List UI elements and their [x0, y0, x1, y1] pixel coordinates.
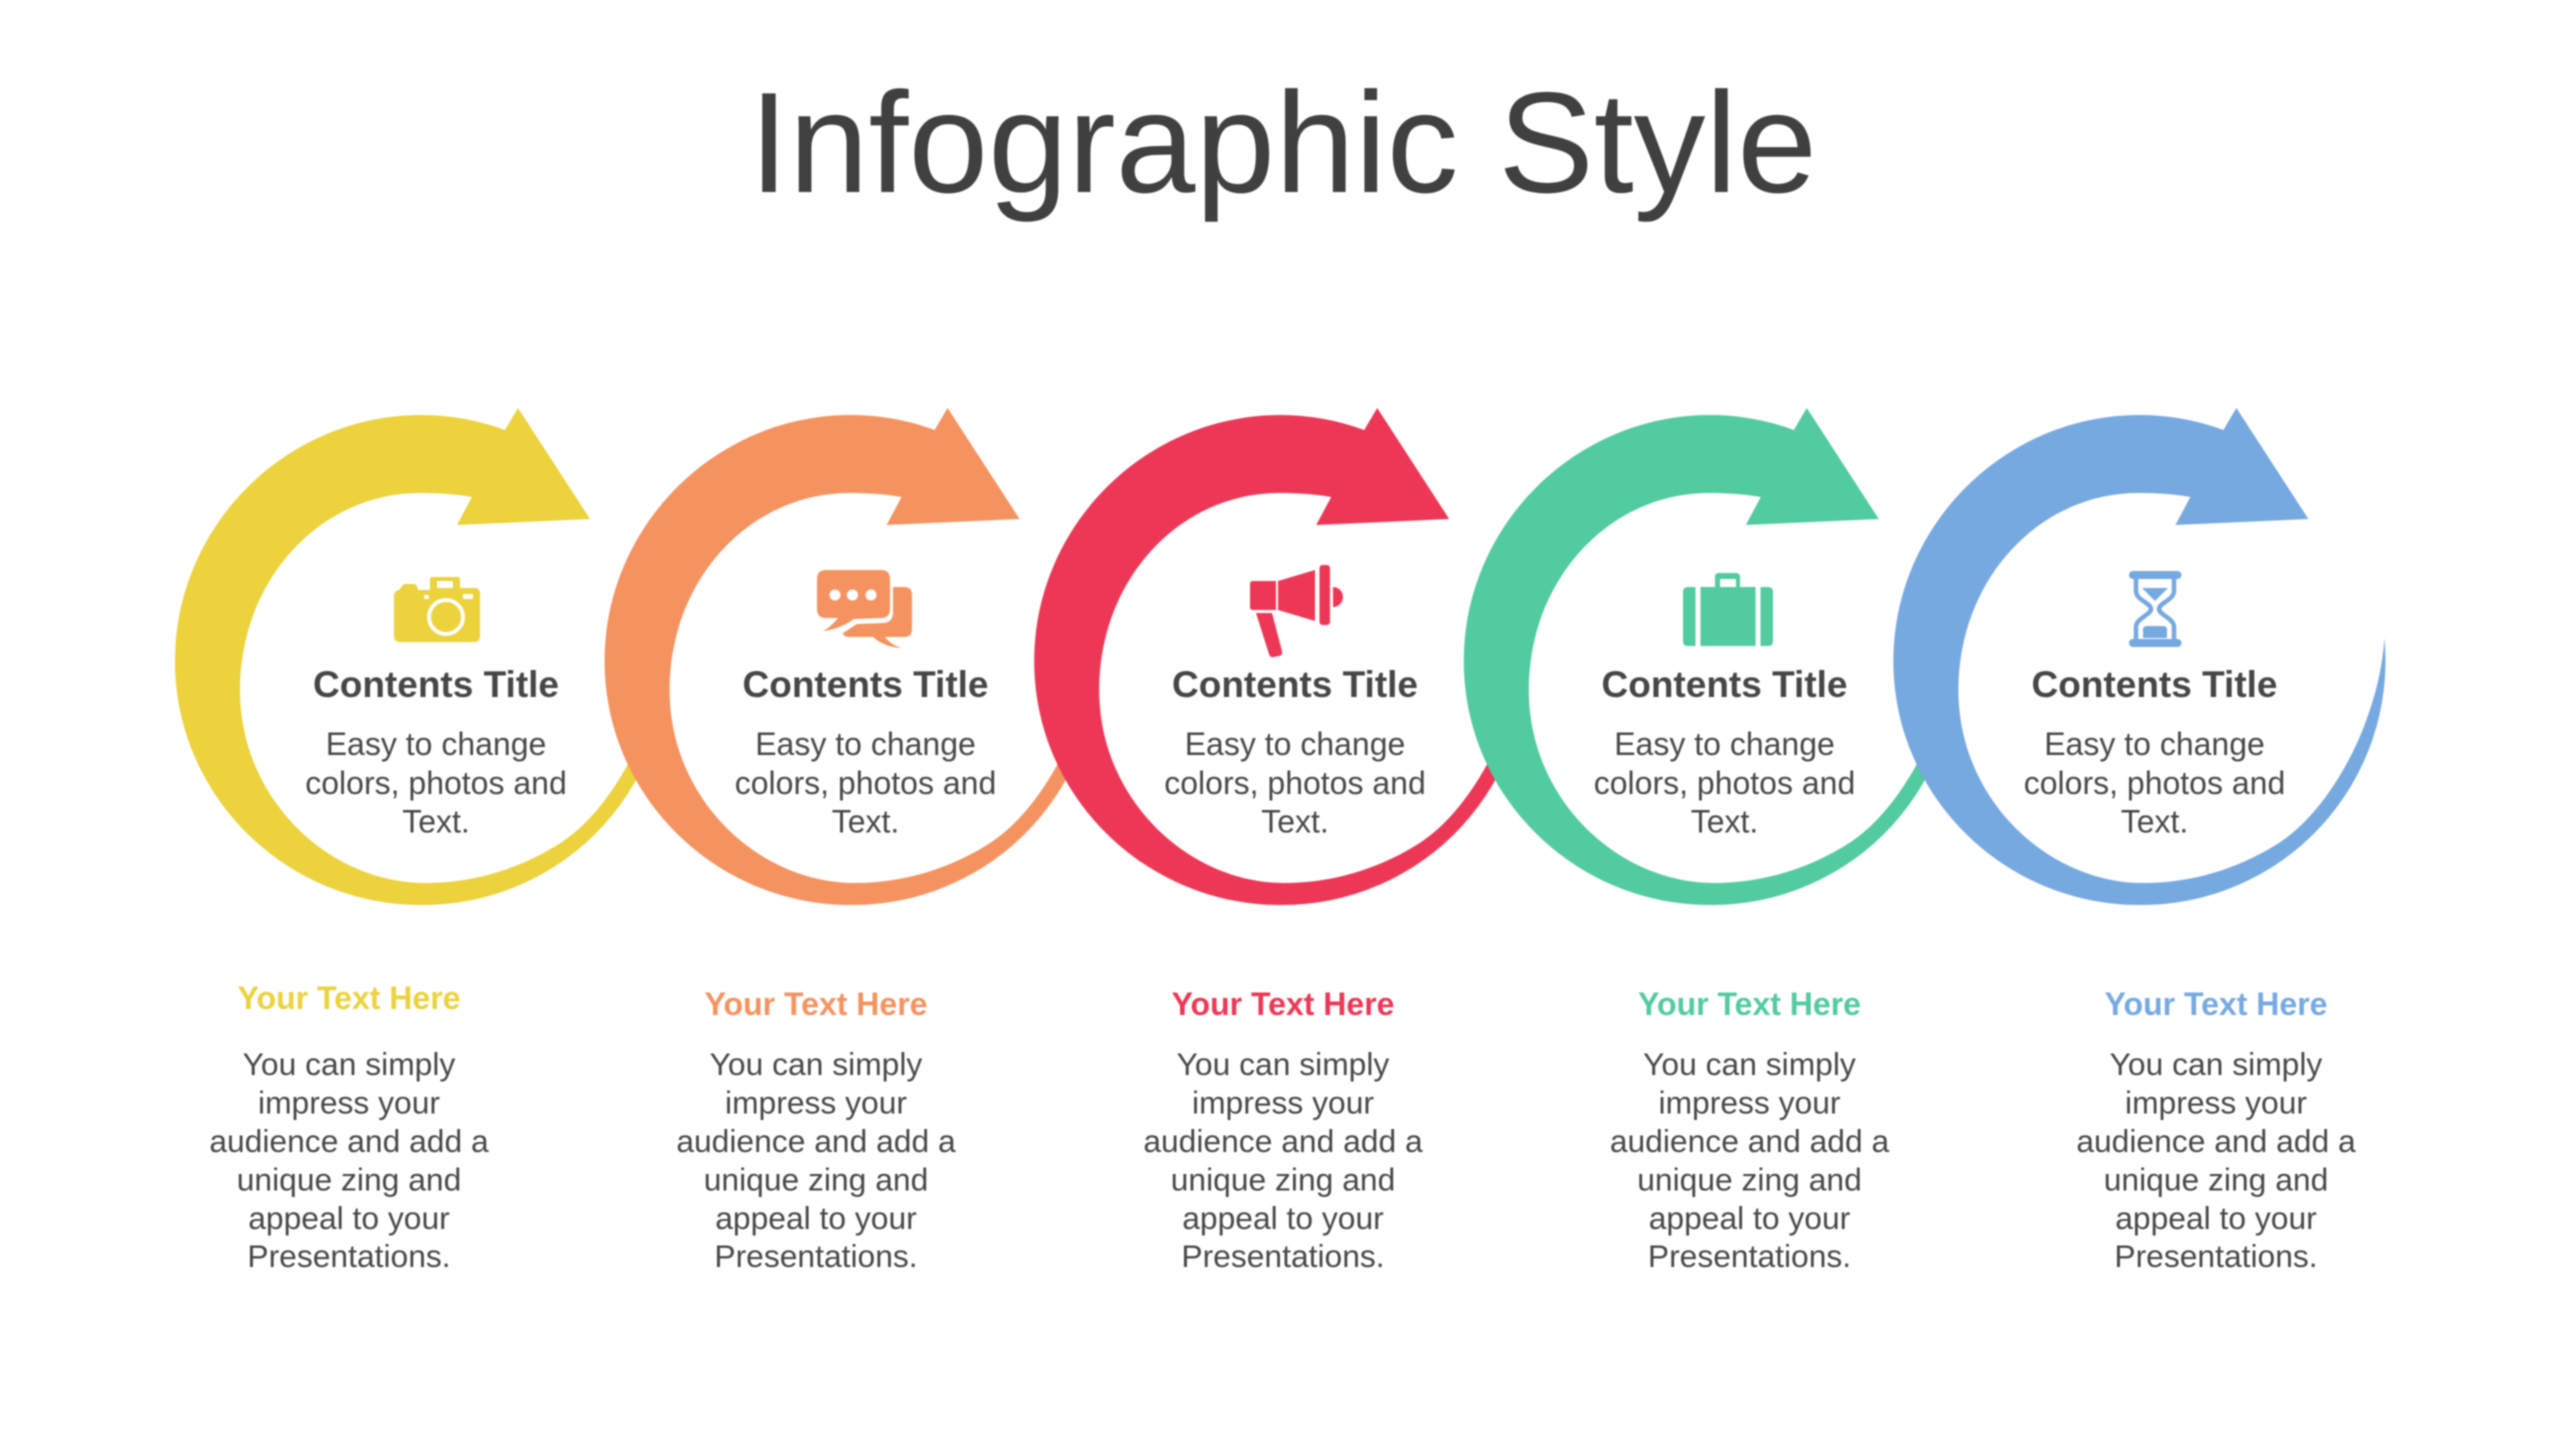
- lower text block: orange: Your Text Here: [705, 986, 927, 1022]
- center text: green circle: Contents Title: [1602, 664, 1848, 705]
- lower text block: red: impress your: [1192, 1084, 1374, 1120]
- lower text block: orange: Presentations.: [714, 1238, 918, 1274]
- lower text block: red: [1143, 986, 1423, 1274]
- lower text block: blue: [2076, 986, 2356, 1274]
- center text: yellow circle: Contents Title: [313, 664, 559, 705]
- lower text block: blue: impress your: [2125, 1084, 2307, 1120]
- lower text block: yellow: Your Text Here: [238, 980, 460, 1016]
- center text: yellow circle: Easy to change: [326, 726, 546, 762]
- center text: blue circle: Easy to change: [2044, 726, 2265, 762]
- lower text block: green: audience and add a: [1610, 1123, 1889, 1159]
- center text: red circle: Text.: [1261, 804, 1329, 840]
- center text: green circle: Text.: [1691, 804, 1758, 840]
- lower text block: orange: appeal to your: [715, 1200, 917, 1236]
- center text: orange circle: [735, 664, 996, 840]
- center text: orange circle: Easy to change: [755, 726, 976, 762]
- center text: blue circle: Contents Title: [2032, 664, 2278, 705]
- lower text block: red: unique zing and: [1171, 1162, 1395, 1198]
- lower text block: red: audience and add a: [1143, 1123, 1423, 1159]
- lower text block: green: Your Text Here: [1638, 986, 1861, 1022]
- center text: red circle: Contents Title: [1172, 664, 1418, 705]
- lower text block: orange: [676, 986, 956, 1274]
- center text: orange circle: Text.: [832, 804, 899, 840]
- lower text block: red: appeal to your: [1182, 1200, 1384, 1236]
- icon: camera: [394, 577, 480, 642]
- lower text block: green: impress your: [1658, 1084, 1841, 1120]
- center text: red circle: Easy to change: [1185, 726, 1405, 762]
- lower text block: green: You can simply: [1643, 1046, 1856, 1082]
- lower text block: blue: unique zing and: [2104, 1162, 2328, 1198]
- icon: megaphone: [1250, 565, 1343, 657]
- lower text block: blue: audience and add a: [2076, 1123, 2356, 1159]
- lower text block: yellow: [209, 980, 489, 1274]
- lower text block: yellow: impress your: [258, 1084, 440, 1120]
- center text: blue circle: Text.: [2121, 804, 2188, 840]
- center text: yellow circle: [305, 664, 567, 840]
- icon: briefcase: [1683, 573, 1773, 646]
- lower text block: yellow: appeal to your: [248, 1200, 450, 1236]
- center text: blue circle: [2024, 664, 2285, 840]
- circular arrow: red: [1034, 408, 1526, 905]
- lower text block: green: Presentations.: [1648, 1238, 1851, 1274]
- title: Infographic Style: [749, 63, 1817, 223]
- lower text block: green: appeal to your: [1649, 1200, 1851, 1236]
- circular arrow: green: [1464, 408, 1956, 905]
- lower text block: yellow: audience and add a: [209, 1123, 489, 1159]
- center text: blue circle: colors, photos and: [2024, 765, 2285, 801]
- center text: yellow circle: Text.: [402, 804, 470, 840]
- center text: green circle: Easy to change: [1614, 726, 1835, 762]
- lower text block: yellow: Presentations.: [247, 1238, 451, 1274]
- lower text block: green: unique zing and: [1637, 1162, 1862, 1198]
- center text: red circle: colors, photos and: [1164, 765, 1426, 801]
- circular arrow: blue: [1893, 408, 2385, 905]
- icon: hourglass: [2129, 571, 2182, 647]
- lower text block: green: [1610, 986, 1889, 1274]
- lower text block: orange: impress your: [725, 1084, 907, 1120]
- center text: orange circle: Contents Title: [742, 664, 988, 705]
- center text: orange circle: colors, photos and: [735, 765, 996, 801]
- lower text block: blue: You can simply: [2110, 1046, 2322, 1082]
- lower text block: red: You can simply: [1177, 1046, 1389, 1082]
- lower text block: blue: Presentations.: [2114, 1238, 2318, 1274]
- lower text block: blue: Your Text Here: [2105, 986, 2327, 1022]
- lower text block: orange: audience and add a: [676, 1123, 956, 1159]
- center text: green circle: colors, photos and: [1594, 765, 1855, 801]
- lower text block: orange: unique zing and: [704, 1162, 928, 1198]
- lower text block: red: Your Text Here: [1172, 986, 1394, 1022]
- lower text block: red: Presentations.: [1181, 1238, 1385, 1274]
- lower text block: blue: appeal to your: [2115, 1200, 2317, 1236]
- circular arrow: yellow: [175, 408, 667, 905]
- lower text block: orange: You can simply: [710, 1046, 922, 1082]
- center text: green circle: [1594, 664, 1855, 840]
- lower text block: yellow: You can simply: [243, 1046, 455, 1082]
- center text: yellow circle: colors, photos and: [305, 765, 567, 801]
- center text: red circle: [1164, 664, 1426, 840]
- icon: chat bubbles: [817, 570, 912, 648]
- lower text block: yellow: unique zing and: [237, 1162, 461, 1198]
- circular arrow: orange: [605, 408, 1097, 905]
